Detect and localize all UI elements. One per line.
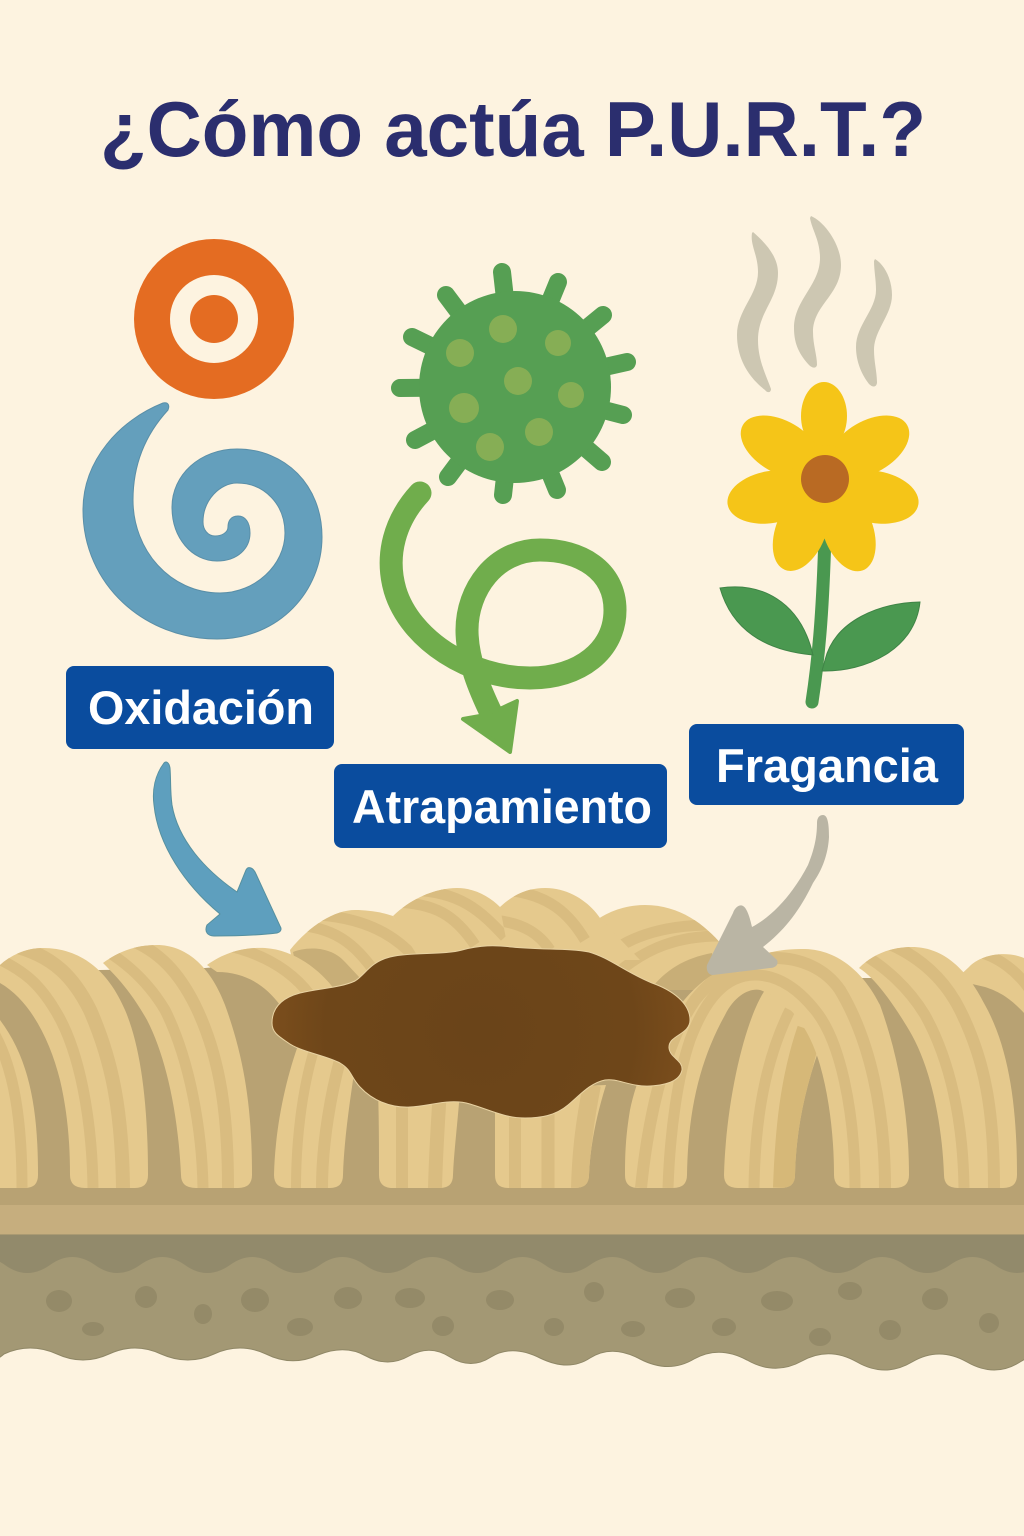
- icon: green virus: [400, 272, 627, 495]
- tuft K: [964, 954, 1024, 1013]
- back tuft hump 2: [393, 888, 508, 954]
- icon: smoke wisps: [737, 216, 892, 392]
- tuft A: [0, 1020, 38, 1188]
- brown stain: [272, 946, 690, 1118]
- carpet underlay foam: [0, 1235, 1024, 1370]
- icon: green looping arrow: [391, 493, 615, 752]
- tuft H: [724, 992, 817, 1188]
- label: Atrapamiento: [334, 764, 667, 848]
- carpet cross-section: [0, 880, 1024, 1370]
- tuft hump behind stain left: [207, 948, 332, 1004]
- tuft G large arch: [620, 945, 915, 1190]
- carpet tufts: [0, 880, 1024, 1190]
- back tuft hump 1: [290, 910, 416, 986]
- tuft B: [0, 948, 148, 1188]
- tuft E: [378, 1101, 459, 1188]
- icon: blue spiral: [83, 403, 322, 639]
- label: Oxidación: Oxidación: [88, 681, 314, 734]
- back tuft hump 4: [600, 905, 719, 990]
- label: Fragancia: Fragancia: [716, 739, 939, 792]
- carpet pile base: [0, 955, 1024, 1205]
- icon: oxidation target: [134, 239, 294, 399]
- arrow: grey to carpet: [707, 815, 829, 975]
- carpet backing strip: [0, 1205, 1024, 1235]
- tuft D: [274, 1048, 354, 1188]
- title: ¿Cómo actúa P.U.R.T.?: [100, 85, 926, 173]
- label: Atrapamiento: Atrapamiento: [352, 780, 652, 833]
- label: Fragancia: [689, 724, 964, 805]
- tuft J: [859, 947, 1017, 1188]
- arrow: blue to stain: [153, 762, 281, 936]
- icon: yellow flower: [720, 382, 923, 702]
- back tuft hump 3: [500, 888, 640, 960]
- tuft C: [103, 945, 252, 1188]
- label: Oxidación: [66, 666, 334, 749]
- tuft F: [495, 1085, 606, 1188]
